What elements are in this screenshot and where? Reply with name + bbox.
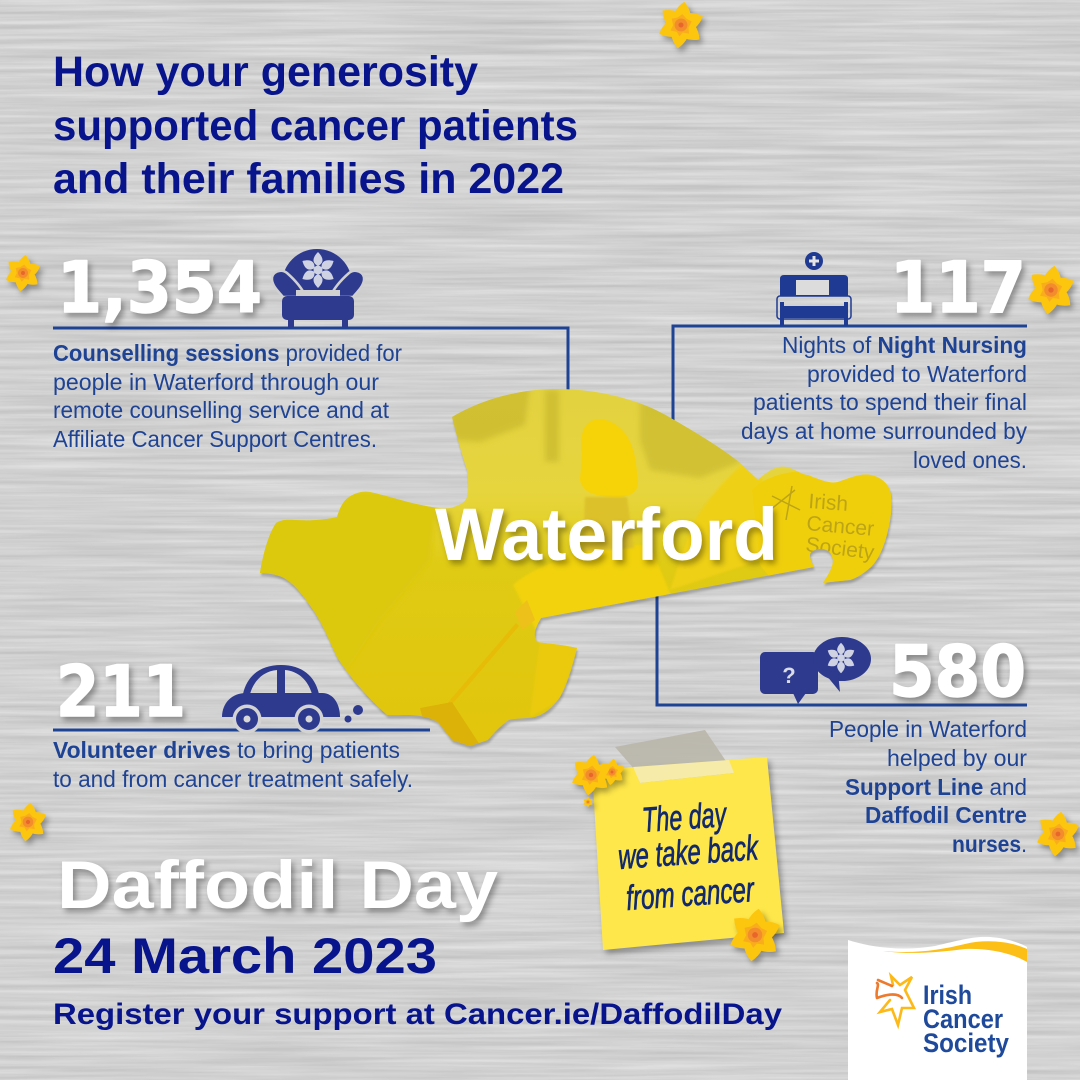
description: nurses. bbox=[952, 831, 1027, 857]
logo wordmark: Society bbox=[923, 1028, 1009, 1058]
place name: Waterford: Waterford bbox=[435, 493, 778, 576]
description: to and from cancer treatment safely. bbox=[53, 766, 413, 792]
stat: 1,354 counselling sessions bbox=[1, 247, 402, 452]
connector lines bbox=[53, 326, 1027, 730]
icon: car bbox=[222, 665, 363, 734]
description: people in Waterford through our bbox=[53, 369, 379, 395]
icon: hospital bed bbox=[777, 252, 851, 326]
number: 117 bbox=[890, 247, 1026, 329]
photo: second person in society T-shirt: Cancer bbox=[806, 512, 875, 541]
call to action: Register your support at Cancer.ie/DaffodilDay bbox=[53, 998, 782, 1031]
icon: daffodil bbox=[1, 252, 45, 294]
logo: Irish Cancer Society bbox=[848, 937, 1027, 1080]
number: 580 bbox=[889, 631, 1026, 713]
description bbox=[829, 716, 1027, 857]
handwritten text bbox=[617, 795, 760, 918]
sticky note bbox=[567, 730, 786, 965]
photo: second person in society T-shirt: Irish bbox=[808, 490, 849, 516]
logo flower bbox=[877, 976, 914, 1025]
note paper bbox=[592, 757, 784, 950]
decorative daffodil top bbox=[654, 0, 708, 52]
stat: 580 people helped bbox=[760, 631, 1080, 859]
description: days at home surrounded by bbox=[741, 418, 1027, 444]
photo: second person in society T-shirt bbox=[670, 462, 895, 590]
icon: armchair bbox=[272, 249, 364, 328]
description bbox=[53, 737, 413, 792]
logo wordmark: Cancer bbox=[923, 1004, 1003, 1034]
title: How your generosity bbox=[53, 48, 478, 96]
title bbox=[53, 48, 578, 203]
handwritten text: from cancer bbox=[625, 870, 756, 918]
icon: speech bubbles: ? bbox=[782, 663, 796, 688]
icon: speech bubbles bbox=[760, 637, 871, 704]
decorative daffodil left bbox=[5, 800, 51, 844]
description bbox=[53, 340, 402, 452]
description: Support Line and bbox=[845, 774, 1027, 800]
description: Counselling sessions provided for bbox=[53, 340, 402, 366]
photo: trees bbox=[448, 385, 740, 478]
handwritten text: we take back bbox=[617, 828, 760, 877]
title: supported cancer patients bbox=[53, 102, 578, 150]
photo: second person in society T-shirt: Society bbox=[804, 533, 876, 564]
map of Waterford with photo bbox=[250, 380, 900, 750]
description: Affiliate Cancer Support Centres. bbox=[53, 426, 377, 452]
logo wordmark bbox=[923, 980, 1009, 1058]
icon: daffodil bbox=[1022, 262, 1080, 318]
number: 211 bbox=[56, 651, 186, 733]
campaign name: Daffodil Day bbox=[57, 847, 498, 923]
date: 24 March 2023 bbox=[53, 928, 437, 984]
photo: person in yellow bbox=[420, 419, 673, 748]
photo: grass verge bbox=[250, 490, 440, 680]
description: Volunteer drives to bring patients bbox=[53, 737, 400, 763]
description: provided to Waterford bbox=[807, 361, 1027, 387]
description: patients to spend their final bbox=[753, 389, 1027, 415]
description: People in Waterford bbox=[829, 716, 1027, 742]
stat: 211 volunteer drives bbox=[53, 651, 413, 792]
description: Daffodil Centre bbox=[865, 802, 1027, 828]
description: remote counselling service and at bbox=[53, 397, 389, 423]
icon: daffodil bbox=[1032, 809, 1080, 859]
handwritten text: The day bbox=[641, 795, 729, 840]
note daffodils bbox=[567, 752, 786, 965]
stat: 117 nights of night nursing bbox=[741, 247, 1080, 473]
description bbox=[741, 332, 1027, 473]
description: helped by our bbox=[887, 745, 1027, 771]
tape bbox=[615, 730, 734, 783]
number: 1,354 bbox=[57, 247, 262, 329]
title: and their families in 2022 bbox=[53, 155, 564, 203]
description: Nights of Night Nursing bbox=[782, 332, 1027, 358]
logo wordmark: Irish bbox=[923, 980, 972, 1010]
description: loved ones. bbox=[913, 447, 1027, 473]
